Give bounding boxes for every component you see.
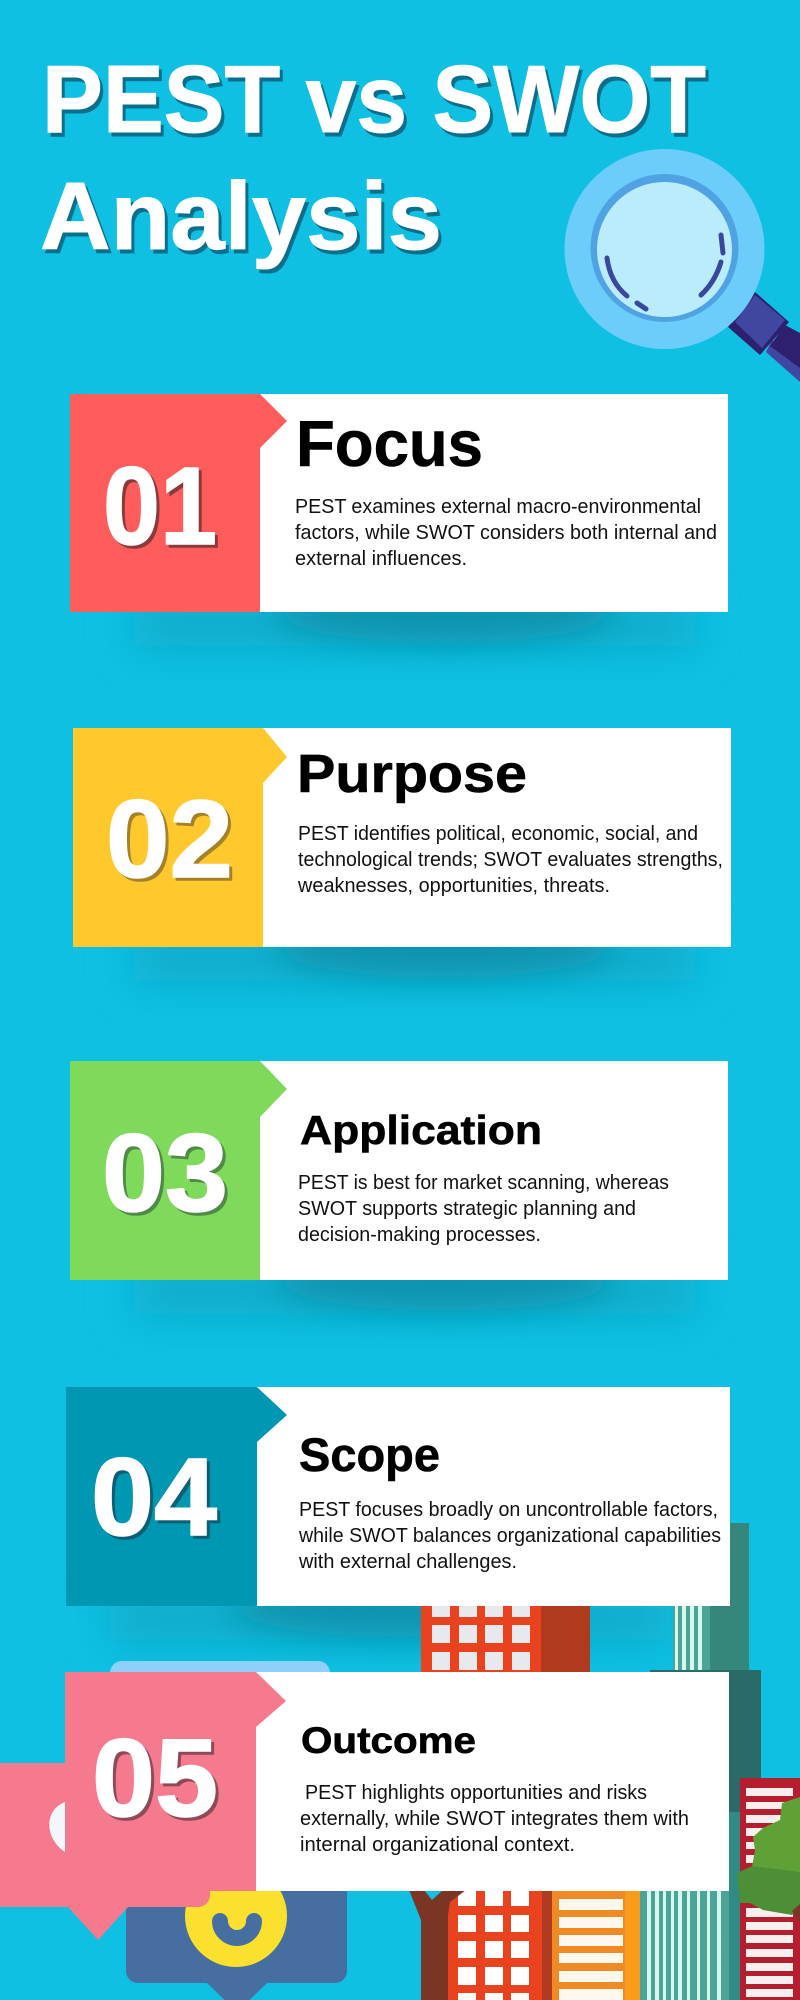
- number: 03: [102, 1112, 228, 1235]
- panel: red number tab: [70, 394, 287, 612]
- building: crimson: [740, 1778, 800, 2000]
- panel: yellow number tab: [73, 728, 287, 947]
- building: orange: [552, 1885, 640, 2000]
- building: striped teal: [640, 1885, 729, 2000]
- text block: while SWOT balances organizational capabilities: [298, 1525, 721, 1547]
- card 05: Outcome: [65, 1672, 729, 1891]
- text block: PEST examines external macro-environmental: [295, 496, 701, 518]
- text block: weaknesses, opportunities, threats.: [297, 875, 610, 897]
- text block: PEST is best for market scanning, whereas: [298, 1172, 669, 1194]
- text block: SWOT supports strategic planning and: [298, 1198, 636, 1220]
- building: lower red-orange: [448, 1885, 552, 2000]
- illustration: city buildings: [409, 1523, 800, 2000]
- bubble: pink: [0, 1763, 210, 1940]
- panel: green number tab: [70, 1061, 287, 1280]
- card 04: Scope: [66, 1387, 730, 1606]
- tree: right foliage: [737, 1797, 800, 1922]
- card 01: Focus: [70, 394, 728, 612]
- panel: pink number tab: [65, 1672, 286, 1891]
- text block: with external challenges.: [298, 1551, 517, 1573]
- icon: magnifying glass: [564, 149, 800, 382]
- heading: Outcome: [301, 1720, 476, 1761]
- panel: white: [260, 394, 728, 612]
- title: Analysis: [40, 163, 442, 270]
- icon: yellow smile: [185, 1865, 287, 1967]
- text block: factors, while SWOT considers both internal and: [295, 522, 717, 544]
- heading: Focus: [296, 407, 483, 480]
- card drop shadows: [110, 582, 695, 1640]
- heading: Purpose: [297, 744, 527, 804]
- number: 02: [106, 778, 233, 901]
- heading: Application: [300, 1107, 542, 1153]
- card 03: Application: [70, 1061, 728, 1280]
- bubble: dark blue: [126, 1885, 347, 2000]
- panel: white: [257, 1387, 730, 1606]
- number: 05: [92, 1717, 218, 1840]
- text block: [295, 496, 717, 570]
- text block: PEST identifies political, economic, social, and: [298, 823, 698, 845]
- panel: white: [256, 1672, 729, 1891]
- text block: technological trends; SWOT evaluates strengths,: [298, 849, 723, 871]
- card 02: Purpose: [73, 728, 731, 947]
- text block: external influences.: [295, 548, 467, 570]
- building: tall teal tower: [673, 1523, 749, 1673]
- text block: PEST highlights opportunities and risks: [305, 1782, 647, 1804]
- heading: Scope: [299, 1428, 440, 1481]
- number: 01: [103, 445, 217, 568]
- title: [40, 46, 706, 270]
- panel: white: [263, 728, 731, 947]
- text block: [298, 1172, 669, 1246]
- panel: teal number tab: [66, 1387, 287, 1606]
- icon: white crescent: [49, 1802, 65, 1852]
- bubble: light blue: [110, 1661, 330, 1721]
- text block: decision-making processes.: [298, 1224, 541, 1246]
- tree: brown trunk: [409, 1890, 466, 2000]
- number: 04: [91, 1436, 217, 1559]
- building: dark teal block: [650, 1670, 761, 2000]
- illustration: speech bubbles: [0, 1661, 347, 2000]
- text block: externally, while SWOT integrates them with: [300, 1808, 689, 1830]
- panel: white: [260, 1061, 728, 1280]
- building: orange-red upper tower: [421, 1600, 590, 1675]
- text block: [300, 1782, 689, 1856]
- text block: [297, 823, 723, 897]
- text block: [298, 1499, 721, 1573]
- text block: internal organizational context.: [300, 1834, 575, 1856]
- text block: PEST focuses broadly on uncontrollable factors,: [299, 1499, 718, 1521]
- title: PEST vs SWOT: [42, 46, 706, 153]
